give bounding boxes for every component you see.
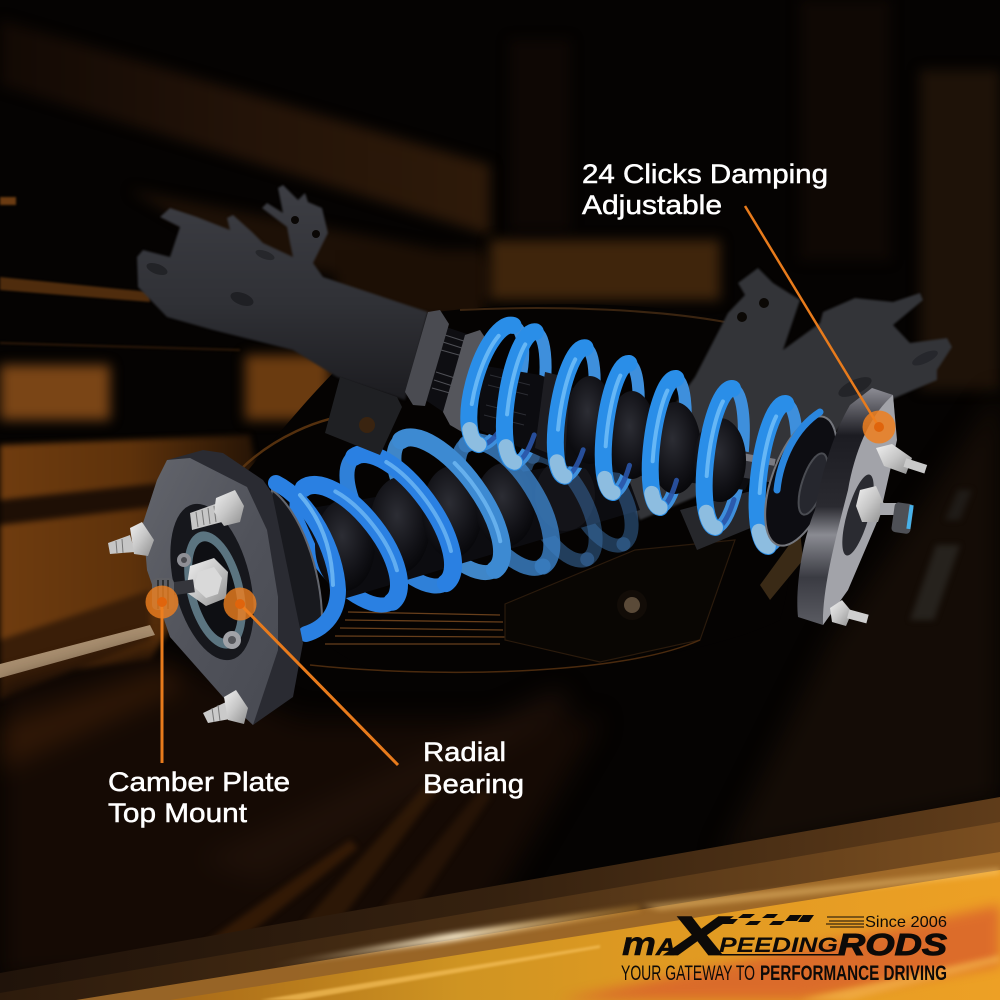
front strut dust cap and first coil [268, 483, 338, 640]
callout line: radial bearing [240, 604, 398, 765]
label: 24 clicks damping adjustable: Adjustable [582, 190, 722, 220]
label: 24 clicks damping adjustable: 24 Clicks Damping [582, 159, 828, 189]
callout marker: damping [862, 410, 896, 444]
front strut: far bracket and tube [620, 268, 952, 550]
coil lower return edges [479, 420, 787, 548]
label: radial bearing: Bearing [423, 769, 524, 799]
logo: wordmark [622, 904, 947, 967]
label: 24 clicks damping adjustable [582, 159, 828, 220]
lock ring near spring [443, 330, 490, 432]
coil lower pale highlights [466, 429, 770, 546]
background: distant orange light streaks [0, 197, 240, 350]
car grille [325, 612, 505, 644]
rear strut dust cap [750, 407, 852, 555]
front strut bellows [300, 455, 640, 600]
logo: tagline [621, 962, 947, 985]
logo: wordmark: X [663, 904, 734, 967]
rear strut: bracket and tube [137, 185, 490, 455]
logo: tagline: YOUR GATEWAY TO [621, 962, 755, 985]
rear spring: back halves [479, 325, 804, 549]
callout line: damping [745, 206, 879, 427]
front camber plate [108, 450, 303, 725]
logo: speed lines [826, 917, 864, 927]
coil specular stripes [470, 334, 776, 494]
plate center opening [156, 495, 268, 669]
background: lane markings [910, 490, 972, 620]
label: camber plate top mount [108, 767, 290, 828]
bottom bolt [203, 690, 248, 724]
front spring: back halves [278, 440, 623, 621]
label: camber plate top mount: Camber Plate [108, 767, 290, 797]
background: buildings left [0, 20, 490, 420]
rear camber plate [797, 388, 927, 626]
logo: checker flag [721, 914, 814, 925]
brand logo [621, 904, 947, 985]
rear strut shock body and bellows [480, 365, 776, 502]
plate center nut and knob [856, 486, 914, 534]
left bolt [108, 522, 154, 556]
rear spring: front halves [458, 319, 787, 548]
knurled adjuster knob [152, 578, 195, 610]
logo: since 2006: Since 2006 [865, 914, 947, 931]
car lower intake and fog light [505, 540, 735, 662]
label: radial bearing: Radial [423, 737, 506, 767]
callout marker: camber plate [146, 586, 178, 618]
lower plate [680, 490, 755, 550]
callout line: camber plate [160, 602, 164, 763]
background: right road [720, 390, 1000, 860]
cap screws [177, 553, 191, 567]
background: road streaks left [0, 435, 260, 700]
plate top bolt [876, 444, 927, 474]
bottom orange light band [0, 797, 1000, 1000]
strut lug [325, 377, 402, 455]
plate bottom bolt [830, 600, 869, 626]
lower cap screw [223, 631, 241, 649]
logo: wordmark: PEEDING [719, 934, 838, 957]
label: radial bearing [423, 737, 524, 799]
background: dark sports car [240, 304, 803, 674]
background: foreground road [0, 650, 600, 980]
callout marker: radial bearing [224, 588, 256, 620]
background: white road line [0, 625, 155, 678]
logo: wordmark: RODS [838, 927, 947, 962]
threaded adjuster body [418, 325, 485, 430]
center hex nut [186, 558, 228, 606]
logo: wordmark: mA [622, 925, 676, 962]
coil front bodies [458, 319, 786, 546]
plate face [823, 395, 897, 625]
lock ring near tube [405, 310, 449, 406]
top bolt [190, 490, 244, 530]
plate side band [167, 450, 303, 725]
background: buildings right [490, 0, 1000, 390]
background: foreground light rays [180, 780, 492, 960]
plate face [143, 458, 278, 725]
label: camber plate top mount: Top Mount [108, 798, 248, 828]
front spring: front halves [304, 421, 645, 602]
plate side band [797, 388, 895, 625]
